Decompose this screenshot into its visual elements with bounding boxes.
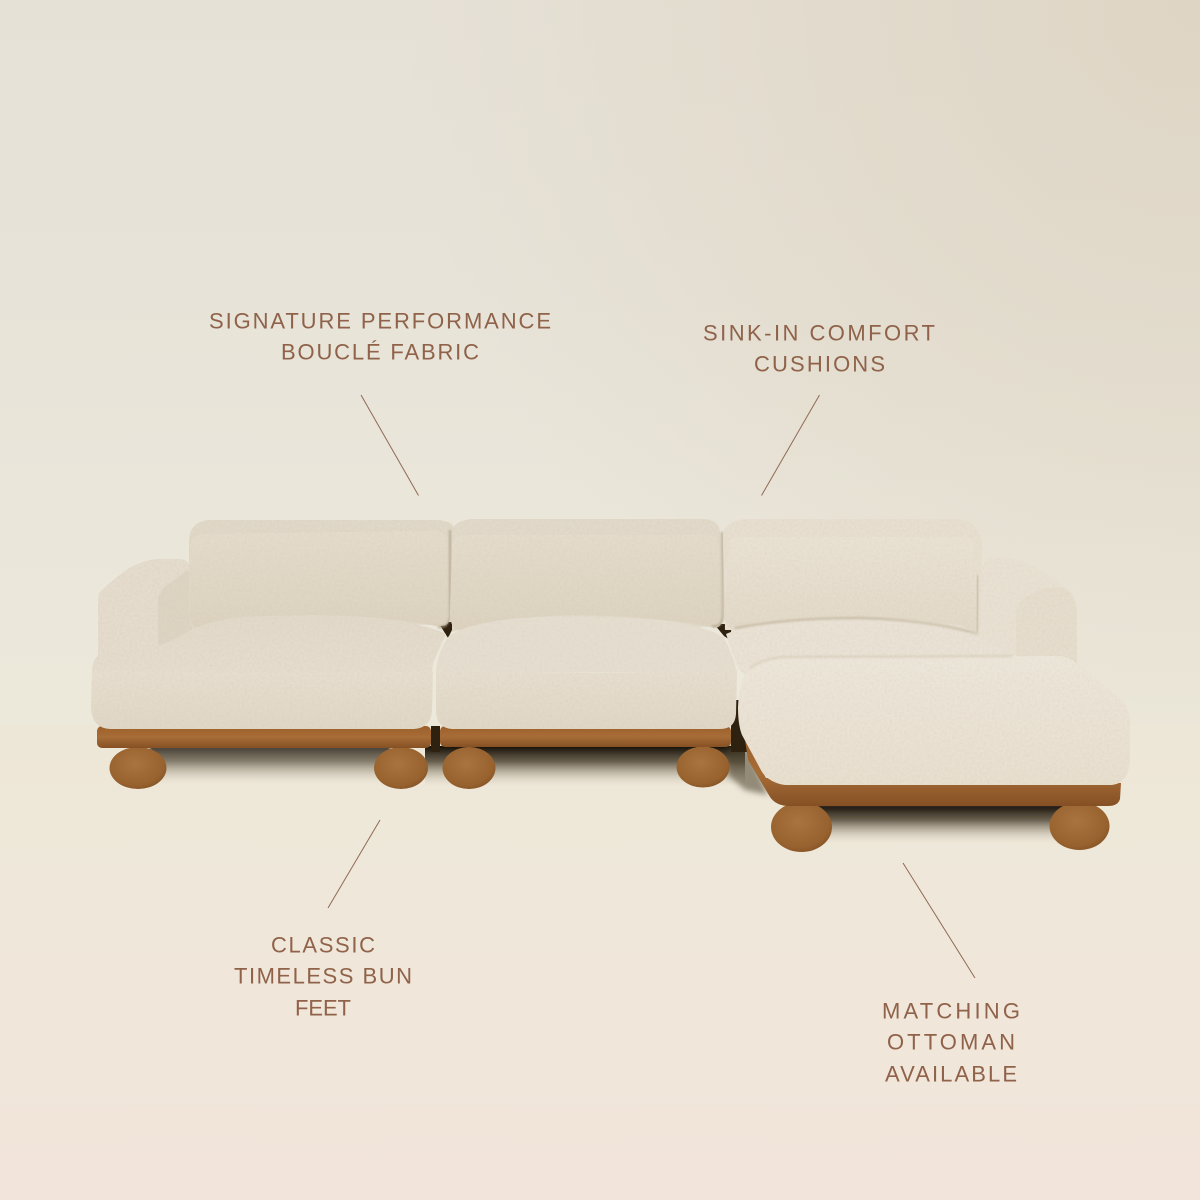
callout: classic timeless bun feet xyxy=(234,820,412,1020)
callout: signature performance bouclé fabric xyxy=(209,308,551,496)
seat cushion: center xyxy=(436,616,737,729)
wall background xyxy=(0,0,1200,726)
callout: matching ottoman available: AVAILABLE xyxy=(885,1062,1017,1086)
dark gaps between sofa modules xyxy=(431,622,748,752)
ottoman cushion xyxy=(738,656,1130,785)
callout: matching ottoman available xyxy=(882,863,1020,1086)
callout: classic timeless bun feet: FEET xyxy=(295,996,351,1020)
right arm xyxy=(978,558,1077,664)
sofa illustration xyxy=(91,519,1130,852)
callout: signature performance bouclé fabric: BOUCLÉ FABRIC xyxy=(281,340,479,364)
seat cushion: left xyxy=(91,616,446,729)
floor background xyxy=(0,725,1200,1200)
seat cushion: right xyxy=(726,618,1014,690)
callout: matching ottoman available: MATCHING xyxy=(882,998,1020,1024)
callout: sink-in comfort cushions: SINK-IN COMFORT xyxy=(703,320,935,346)
callout: sink-in comfort cushions xyxy=(703,320,935,496)
back cushions xyxy=(189,519,982,632)
back cushion: left xyxy=(189,520,454,632)
left arm xyxy=(98,559,195,660)
floor shadow under sofa xyxy=(150,745,1065,843)
upholstery xyxy=(91,519,1130,785)
back cushion: center xyxy=(450,519,723,632)
bun feet: main sofa and ottoman xyxy=(110,746,1110,852)
callout: signature performance bouclé fabric: SIGNATURE PERFORMANCE xyxy=(209,308,551,334)
wooden base rails xyxy=(97,726,1121,806)
callout: matching ottoman available: OTTOMAN xyxy=(887,1030,1015,1054)
back cushion: right xyxy=(723,519,982,632)
callout: classic timeless bun feet: TIMELESS BUN xyxy=(234,964,412,988)
callout: classic timeless bun feet: CLASSIC xyxy=(271,932,375,958)
callout: sink-in comfort cushions: CUSHIONS xyxy=(754,352,885,376)
